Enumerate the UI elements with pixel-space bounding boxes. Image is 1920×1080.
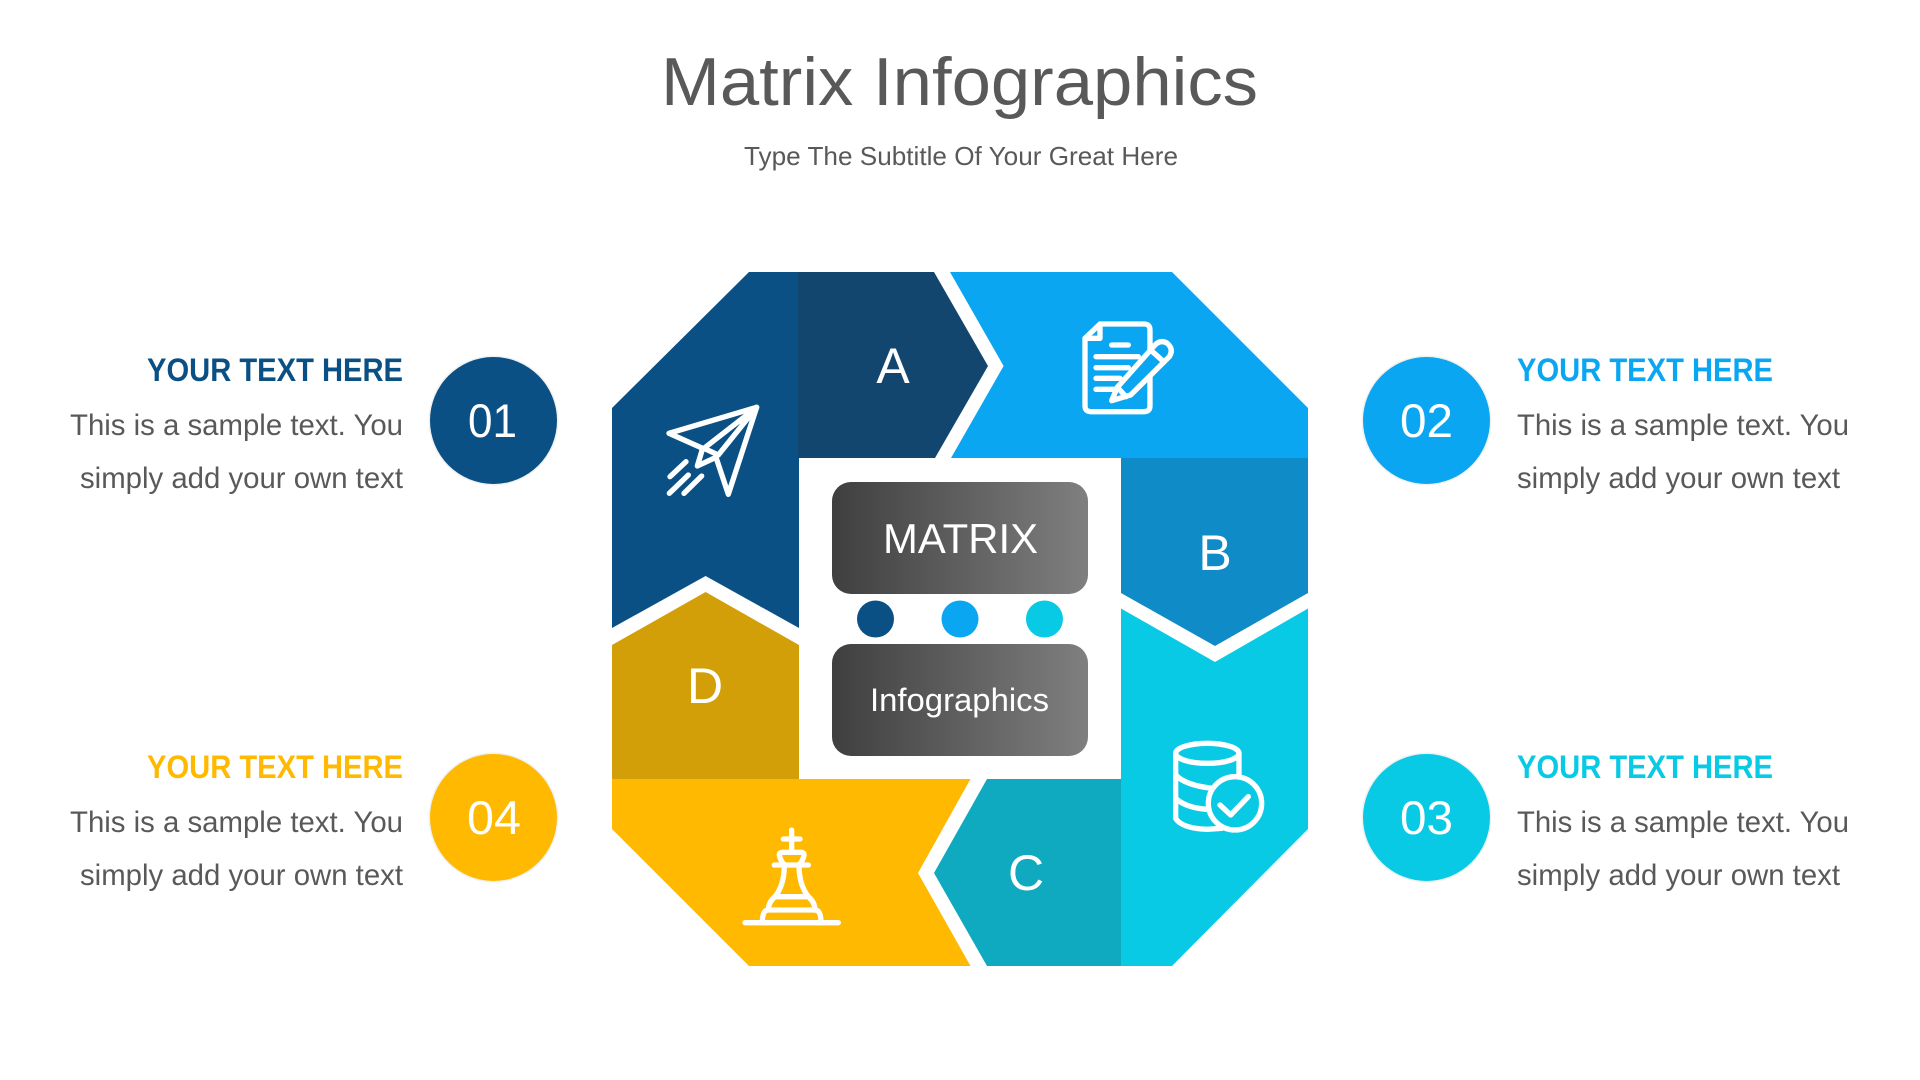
text block 03: This is a sample text. You [1517,806,1849,839]
text block 02: simply add your own text [1517,462,1841,495]
label C: C [1008,845,1044,901]
badge 03 [1362,752,1492,882]
icon: paper plane [669,407,757,494]
text block 01: YOUR TEXT HERE [147,352,403,388]
text block 01: simply add your own text [80,462,404,495]
label B: B [1198,525,1232,581]
panel: dark blue arrow [612,272,799,628]
text block 02 [1517,352,1849,495]
icon: document and pencil [1085,324,1171,412]
panel: gold arrow [612,779,970,966]
text block 01 [70,352,404,495]
badge 01 [428,356,558,486]
text block 04 [70,749,404,892]
panel: light blue arrow [950,272,1308,458]
text block 04: YOUR TEXT HERE [147,749,403,785]
badge 03: 03 [1400,791,1453,844]
text block 03: YOUR TEXT HERE [1517,749,1773,785]
icon: database check [1176,743,1262,830]
label D: D [687,658,723,714]
center panel: matrix label: MATRIX [883,515,1038,562]
center dots [857,600,1063,638]
text block 03: simply add your own text [1517,859,1841,892]
text block 01: This is a sample text. You [70,409,403,442]
text block 03 [1517,749,1849,892]
badge 02 [1362,356,1492,486]
label A: A [876,338,910,394]
badge 04: 04 [467,791,521,844]
text block 02: This is a sample text. You [1517,409,1849,442]
icon: chess king [745,830,838,923]
panel: B [1121,458,1308,646]
text block 04: This is a sample text. You [70,806,403,839]
center panel: infographics label: Infographics [870,682,1049,718]
badge 04 [428,752,558,882]
panel: cyan arrow [1121,608,1308,966]
title: Matrix Infographics [661,44,1258,120]
text block 04: simply add your own text [80,859,404,892]
panel: C [934,779,1121,966]
center panel: infographics label [832,644,1088,756]
badge 01: 01 [468,394,517,447]
subtitle: Type The Subtitle Of Your Great Here [744,141,1178,171]
panel: D [612,592,799,779]
matrix octagon diagram [612,272,1308,966]
center panel: matrix label [832,482,1088,594]
text block 02: YOUR TEXT HERE [1517,352,1773,388]
panel: A [798,272,988,458]
badge 02: 02 [1400,394,1453,447]
